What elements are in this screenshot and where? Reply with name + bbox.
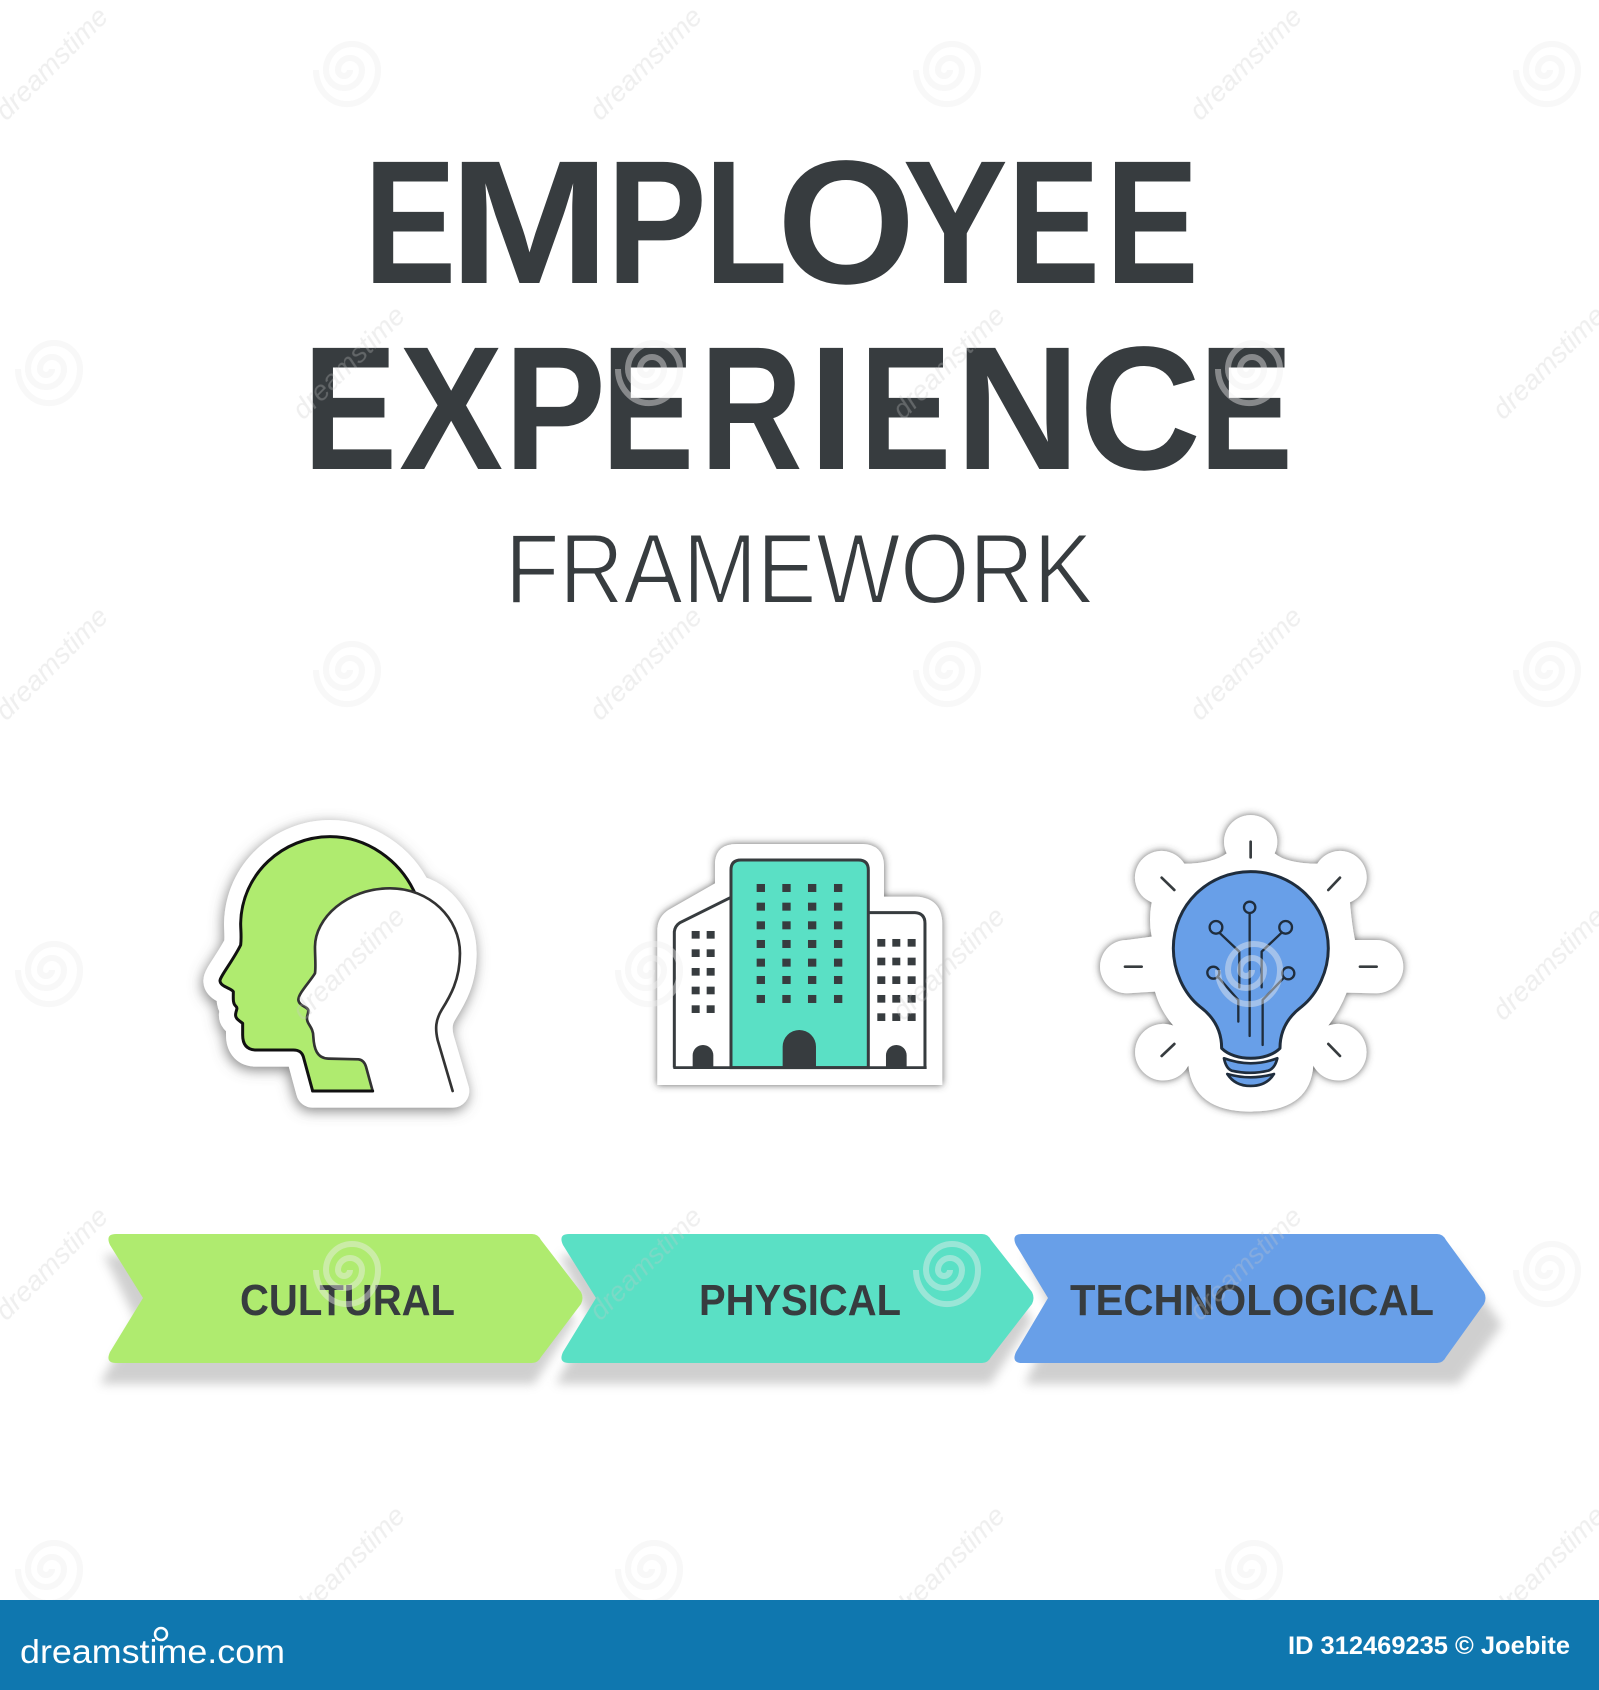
- bulb base: [1224, 1058, 1277, 1086]
- base line: [673, 1064, 927, 1072]
- title line: EXPERIENCE: E: [602, 311, 694, 507]
- watermark pattern: dreamstime: [286, 901, 411, 1026]
- title line: EMPLOYEE: Y: [903, 125, 1008, 321]
- title line: EXPERIENCE: R: [700, 311, 802, 507]
- title line: EXPERIENCE: E: [303, 311, 397, 507]
- green head: [220, 837, 415, 1091]
- label: TECHNOLOGICAL: [1070, 1276, 1434, 1325]
- title line: EXPERIENCE: E: [860, 311, 951, 507]
- sticker backing: [220, 837, 460, 1091]
- title line: EXPERIENCE: I: [809, 311, 854, 507]
- title line: EXPERIENCE: C: [1079, 311, 1201, 507]
- watermark pattern: dreamstime: [886, 901, 1011, 1026]
- title line: EMPLOYEE: E: [1008, 125, 1100, 321]
- icon: office buildings (physical): [657, 844, 942, 1085]
- footer bar: [0, 1600, 1599, 1690]
- circuit: [1207, 902, 1294, 1045]
- footer logo: dreamstime.com: [20, 1633, 285, 1670]
- watermark pattern: dreamstime: [1183, 601, 1308, 726]
- white head: [298, 888, 460, 1091]
- logo swirl: [155, 1628, 167, 1640]
- arrow: PHYSICAL: [561, 1234, 1034, 1363]
- title: [303, 125, 1293, 624]
- watermark pattern: dreamstime: [886, 300, 1011, 425]
- title line: EMPLOYEE: E: [364, 125, 456, 321]
- label: CULTURAL: [240, 1276, 455, 1325]
- watermark pattern: dreamstime: [1183, 1201, 1308, 1326]
- bulb glass: [1173, 872, 1328, 1058]
- central tower: [731, 860, 868, 1068]
- arrow shadows: [100, 1255, 1502, 1384]
- title line: EXPERIENCE: X: [399, 311, 503, 507]
- arrow: TECHNOLOGICAL: [1014, 1234, 1486, 1363]
- sticker backing: [1100, 815, 1403, 1112]
- icon: two head profiles (cultural): [220, 837, 460, 1091]
- watermark pattern: dreamstime: [286, 1500, 411, 1625]
- icon: light bulb with circuit (technological): [1100, 815, 1403, 1112]
- title line: EXPERIENCE: N: [955, 311, 1080, 507]
- windows: [692, 884, 916, 1021]
- arrow: CULTURAL: [108, 1234, 582, 1363]
- watermark pattern: dreamstime: [583, 1, 708, 126]
- title line: EMPLOYEE: L: [705, 125, 788, 321]
- label: PHYSICAL: [699, 1276, 901, 1325]
- subtitle: FRAMEWORK: FRAMEWORK: [505, 513, 1093, 624]
- rays: [1125, 842, 1377, 1056]
- title line: EXPERIENCE: E: [1199, 311, 1293, 507]
- sticker backing: [657, 844, 942, 1085]
- title line: EMPLOYEE: P: [607, 125, 707, 321]
- title line: EMPLOYEE: M: [449, 125, 610, 321]
- title line: EMPLOYEE: O: [777, 125, 915, 321]
- side towers: [674, 897, 925, 1068]
- watermark pattern: dreamstime: [286, 300, 411, 425]
- watermark pattern: dreamstime: [583, 601, 708, 726]
- watermark pattern: dreamstime: [1183, 1, 1308, 126]
- image id and credit: ID 312469235 © Joebite: [1288, 1632, 1570, 1660]
- watermark pattern: dreamstime: [886, 1500, 1011, 1625]
- title line: EMPLOYEE: E: [1106, 125, 1199, 321]
- doors: [693, 1030, 907, 1068]
- title line: EXPERIENCE: P: [504, 311, 606, 507]
- watermark pattern: dreamstime: [583, 1201, 708, 1326]
